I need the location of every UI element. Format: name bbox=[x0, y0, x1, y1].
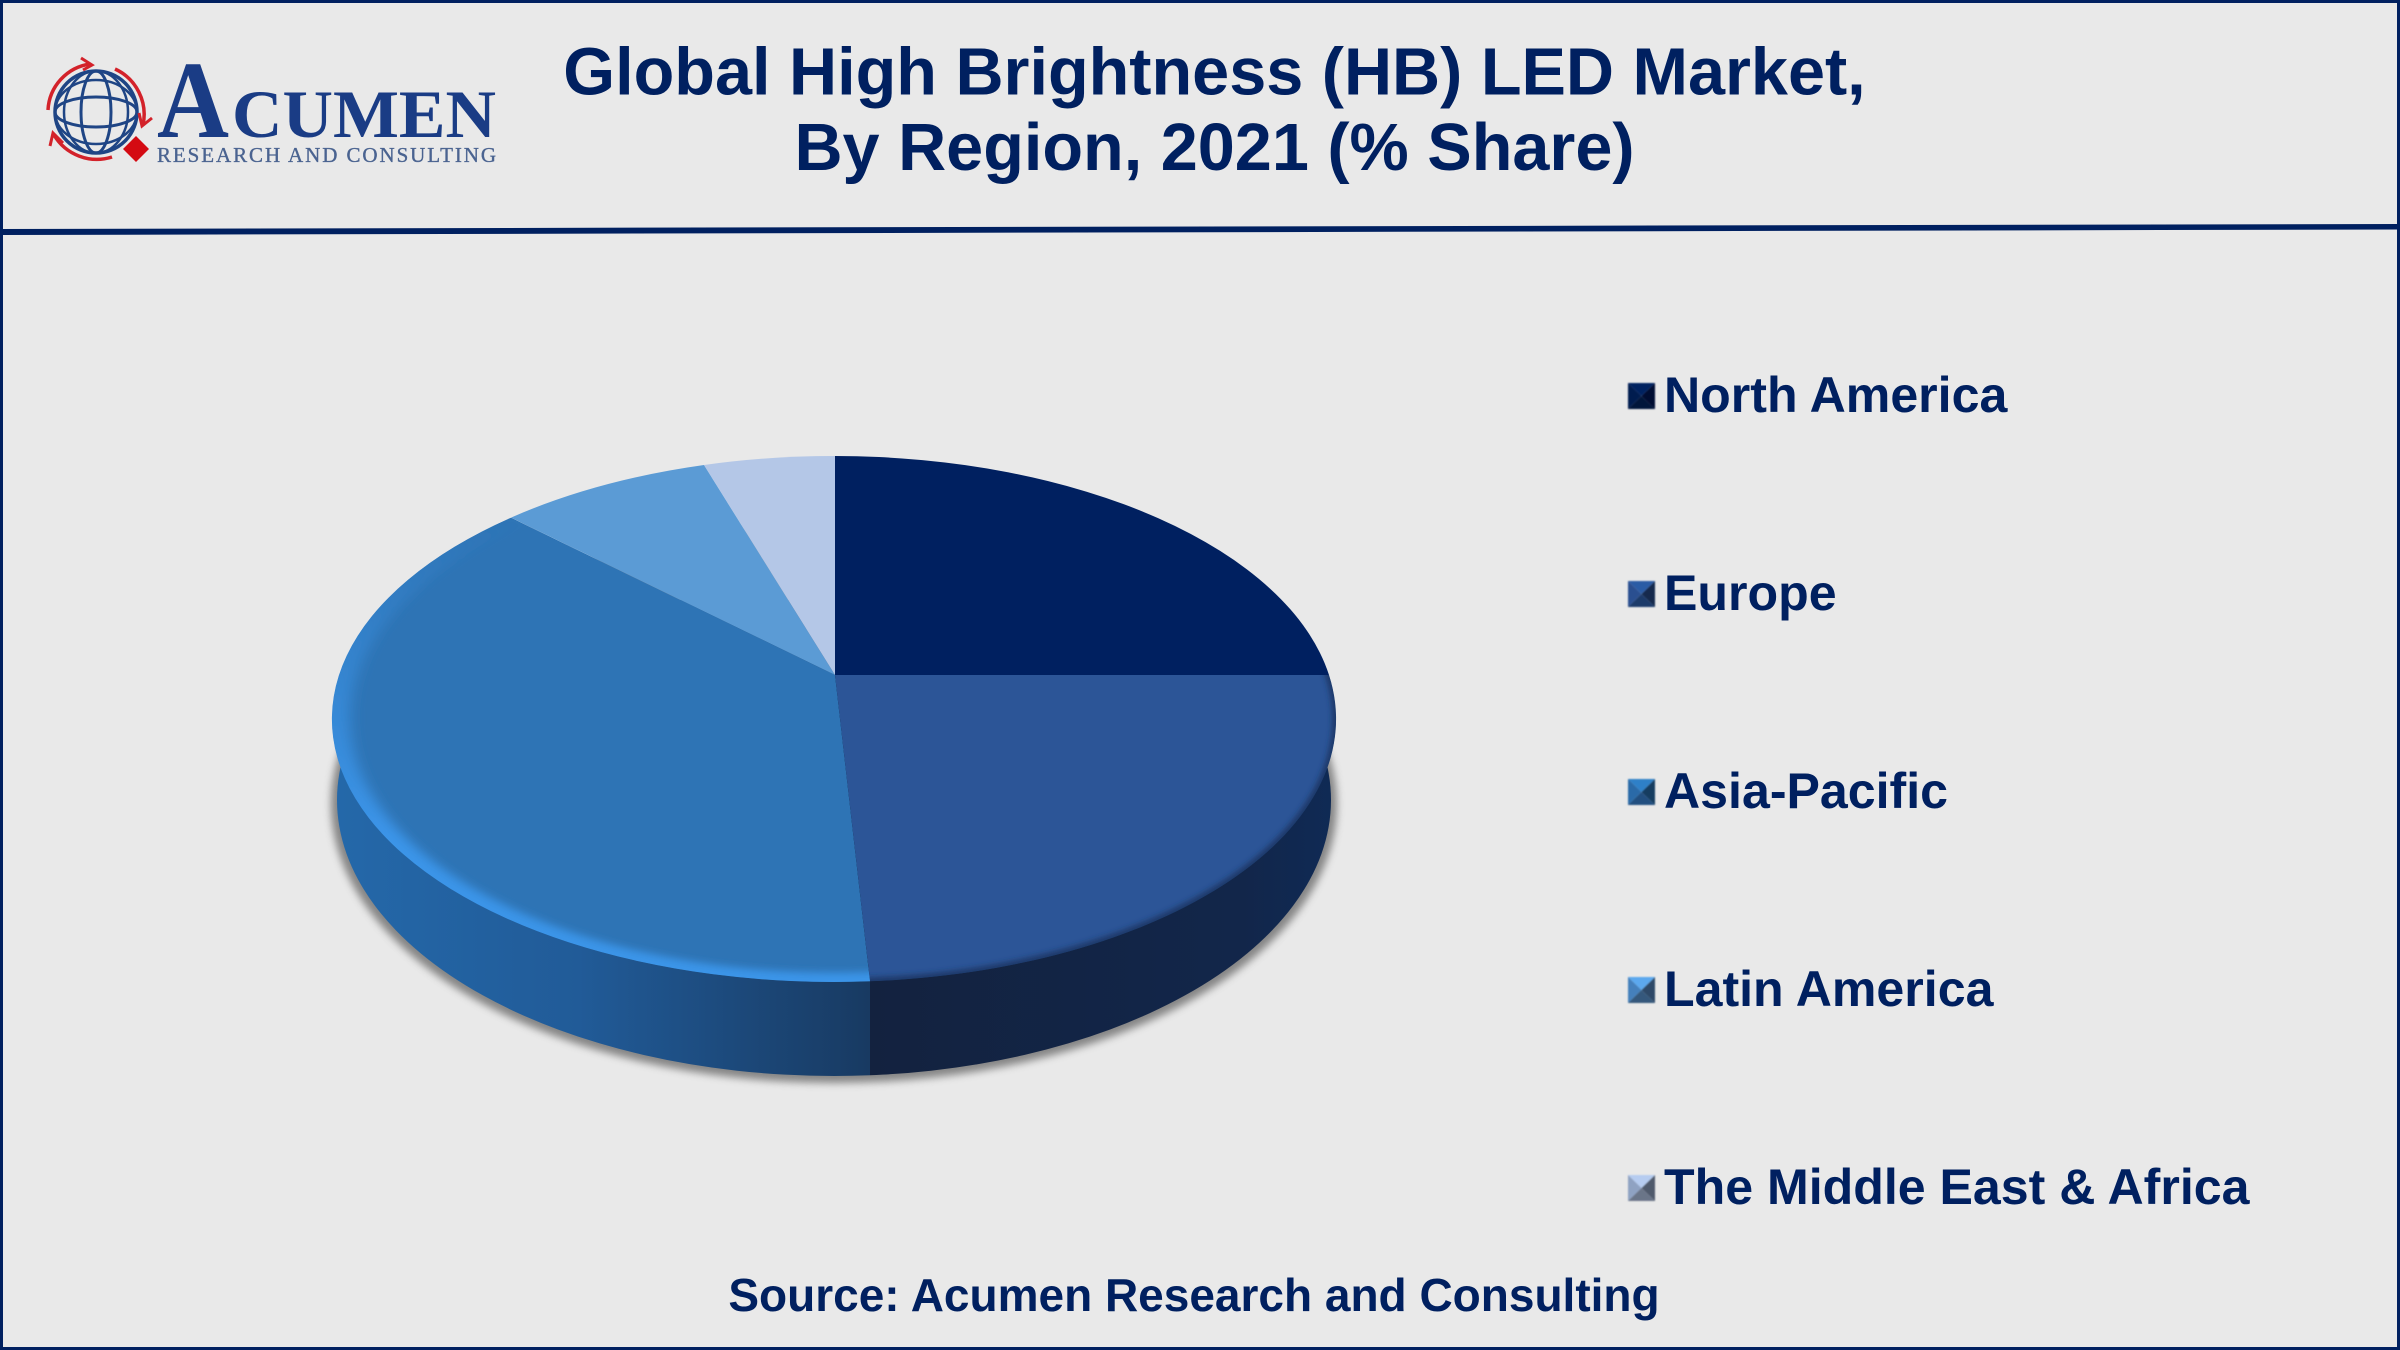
legend bbox=[1628, 367, 2251, 1215]
legend item: Latin America: Latin America bbox=[1664, 961, 1995, 1017]
legend item: Asia-Pacific: Asia-Pacific bbox=[1664, 763, 1948, 819]
logo wordmark: CUMEN bbox=[232, 76, 496, 152]
slice: North America bbox=[835, 456, 1329, 675]
source note: Source: Acumen Research and Consulting bbox=[728, 1269, 1660, 1321]
title: Global High Brightness (HB) LED Market, bbox=[563, 36, 1866, 110]
legend item: Europe: Europe bbox=[1664, 565, 1837, 621]
logo: Acumen Research and Consulting bbox=[48, 39, 496, 167]
legend item: The Middle East & Africa: The Middle East & Africa bbox=[1664, 1159, 2251, 1215]
slice: Asia-Pacific bbox=[332, 518, 870, 982]
pie side wall: left bbox=[337, 600, 870, 1076]
legend item: North America: North America bbox=[1664, 367, 2008, 423]
logo wordmark: RESEARCH AND CONSULTING bbox=[157, 143, 496, 167]
pie drop shadow bbox=[331, 525, 1337, 1083]
logo wordmark: A bbox=[157, 39, 229, 161]
title: By Region, 2021 (% Share) bbox=[794, 111, 1635, 185]
icon: globe with red arrows bbox=[48, 58, 152, 159]
slice: The Middle East & Africa bbox=[704, 456, 835, 675]
slice: Latin America bbox=[511, 465, 835, 675]
slice: Europe bbox=[835, 675, 1336, 982]
header divider line bbox=[0, 224, 2400, 235]
icon: red diamond bbox=[123, 136, 149, 162]
pie side wall: right bbox=[870, 768, 1331, 1076]
pie chart: regional share bbox=[331, 456, 1337, 1083]
logo wordmark bbox=[157, 39, 496, 167]
